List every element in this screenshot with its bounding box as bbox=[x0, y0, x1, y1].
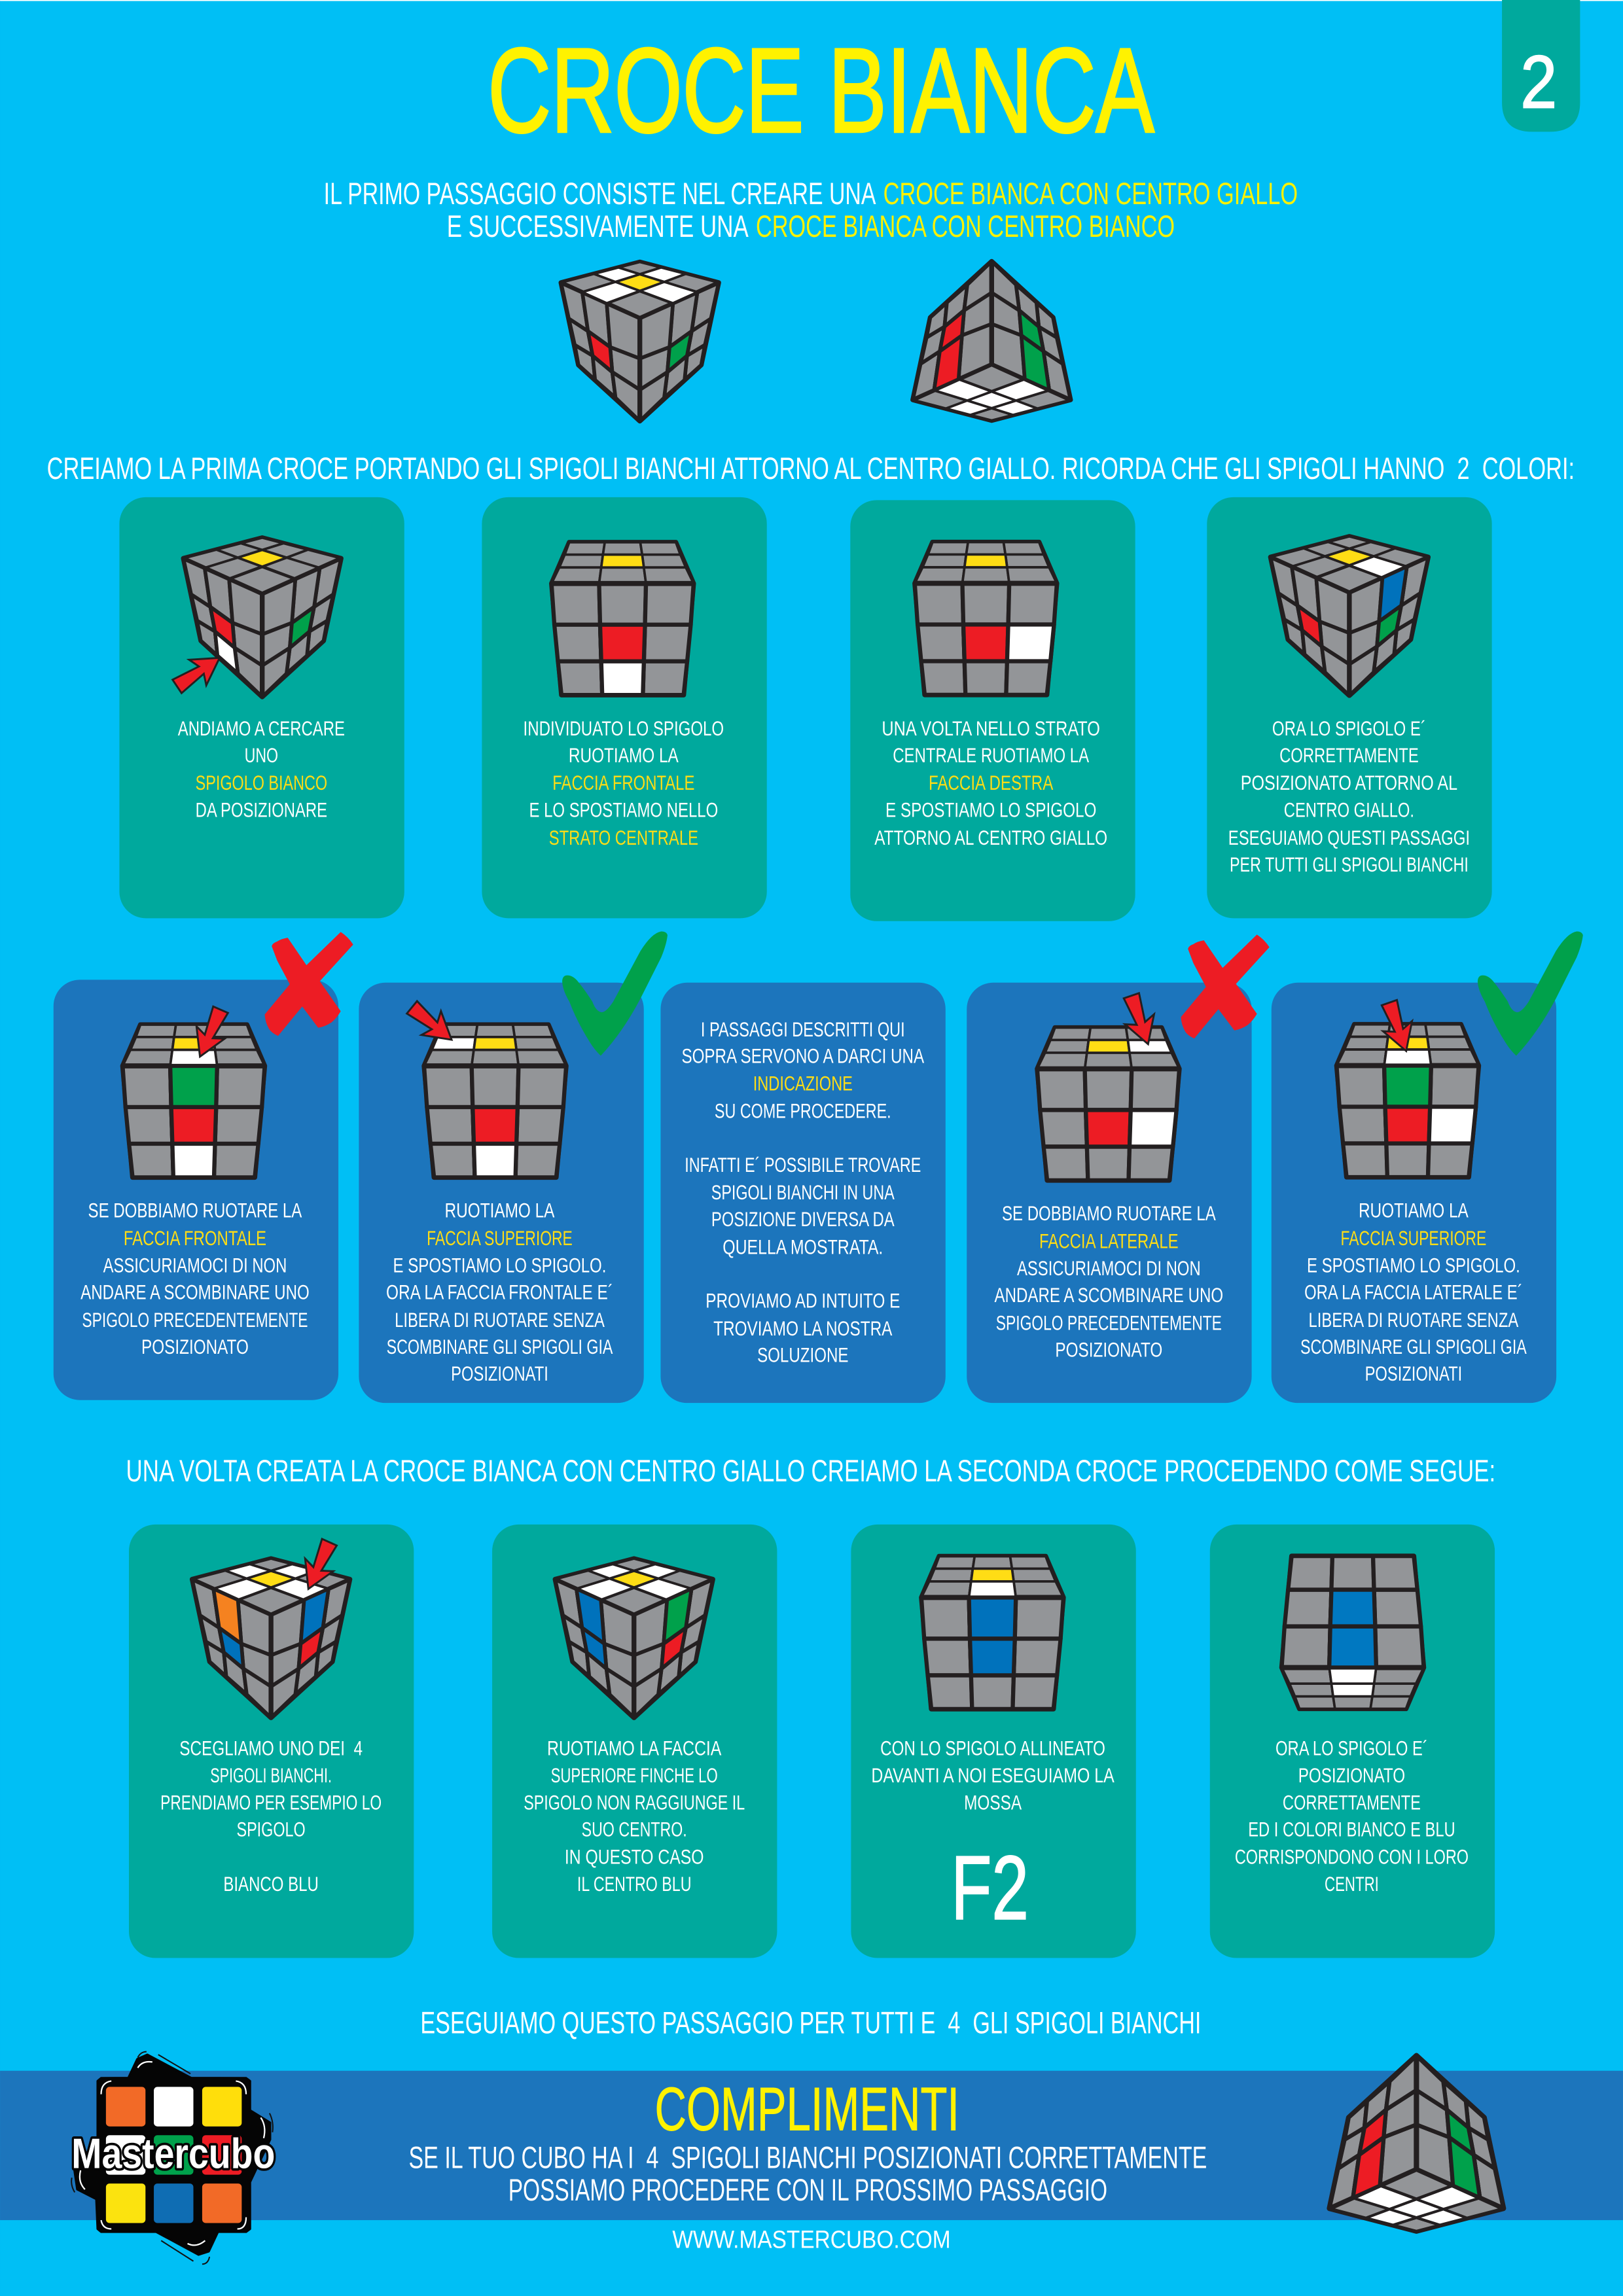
text: ORA LO SPIGOLO E´ bbox=[1275, 1736, 1428, 1759]
step number tab bbox=[1502, 0, 1580, 132]
icon: cube front view bbox=[915, 542, 1057, 695]
text: SCOMBINARE GLI SPIGOLI GIA bbox=[387, 1335, 613, 1358]
icon: cube seen from below bbox=[1281, 1556, 1424, 1708]
text: RUOTIAMO LA bbox=[1359, 1199, 1469, 1222]
text bbox=[1300, 1199, 1527, 1385]
text: PRENDIAMO PER ESEMPIO LO bbox=[160, 1790, 382, 1814]
text: I PASSAGGI DESCRITTI QUI bbox=[701, 1017, 905, 1041]
logo: Mastercubo: Mastercubo bbox=[71, 2130, 275, 2178]
text bbox=[874, 716, 1107, 849]
text: E SPOSTIAMO LO SPIGOLO. bbox=[393, 1254, 606, 1277]
intro text: E SUCCESSIVAMENTE UNA bbox=[447, 209, 749, 243]
text: SUO CENTRO. bbox=[582, 1818, 687, 1841]
icon: cube front view bbox=[1336, 1025, 1478, 1177]
text: E SPOSTIAMO LO SPIGOLO. bbox=[1307, 1254, 1520, 1277]
text: SPIGOLO bbox=[237, 1818, 306, 1841]
text bbox=[160, 1736, 382, 1896]
footer text: POSSIAMO PROCEDERE CON IL PROSSIMO PASSAGGIO bbox=[508, 2172, 1107, 2207]
text bbox=[524, 1736, 745, 1896]
step number tab: 2 bbox=[1520, 41, 1557, 124]
panel: note bbox=[660, 983, 946, 1403]
text: SPIGOLO PRECEDENTEMENTE bbox=[996, 1311, 1222, 1334]
text: ASSICURIAMOCI DI NON bbox=[103, 1254, 287, 1277]
arrow bbox=[402, 995, 461, 1051]
text: SCEGLIAMO UNO DEI 4 bbox=[179, 1736, 363, 1759]
text: SCOMBINARE GLI SPIGOLI GIA bbox=[1300, 1335, 1527, 1358]
text: CENTRO GIALLO. bbox=[1284, 798, 1414, 822]
text: TROVIAMO LA NOSTRA bbox=[713, 1316, 893, 1340]
footer heading: COMPLIMENTI bbox=[655, 2074, 959, 2143]
text: IL CENTRO BLU bbox=[577, 1872, 691, 1896]
text: CON LO SPIGOLO ALLINEATO bbox=[880, 1736, 1105, 1759]
panel: step 2 bbox=[482, 497, 767, 918]
icon: red cross bbox=[264, 932, 353, 1036]
move label F2: F2 bbox=[951, 1837, 1029, 1939]
text: E LO SPOSTIAMO NELLO bbox=[529, 798, 718, 822]
text: SE DOBBIAMO RUOTARE LA bbox=[1002, 1201, 1216, 1225]
title: CROCE BIANCA bbox=[488, 23, 1154, 157]
text: CORRISPONDONO CON I LORO bbox=[1235, 1845, 1469, 1868]
text bbox=[681, 1017, 925, 1366]
arrow bbox=[1375, 998, 1421, 1056]
panel: wrong move, front face bbox=[54, 932, 353, 1400]
text: LIBERA DI RUOTARE SENZA bbox=[1309, 1308, 1519, 1332]
panel: choose edge bbox=[129, 1525, 414, 1958]
text: SPIGOLO PRECEDENTEMENTE bbox=[82, 1308, 308, 1332]
text: ORA LA FACCIA LATERALE E´ bbox=[1304, 1280, 1523, 1303]
text: RUOTIAMO LA bbox=[445, 1199, 555, 1222]
text: ED I COLORI BIANCO E BLU bbox=[1248, 1818, 1455, 1841]
icon: cube with white cross and yellow centre bbox=[561, 262, 719, 421]
text: SU COME PROCEDERE. bbox=[715, 1099, 891, 1123]
icon: cube with white cross bbox=[555, 1559, 713, 1718]
text: QUELLA MOSTRATA. bbox=[722, 1235, 883, 1258]
text: LIBERA DI RUOTARE SENZA bbox=[395, 1308, 605, 1332]
panel: wrong move, side face bbox=[967, 934, 1270, 1403]
arrow bbox=[294, 1536, 344, 1595]
text: CENTRALE RUOTIAMO LA bbox=[893, 743, 1090, 767]
icon: cube front view bbox=[552, 542, 694, 695]
text: E SPOSTIAMO LO SPIGOLO bbox=[885, 798, 1096, 822]
text: DA POSIZIONARE bbox=[196, 798, 327, 822]
panel: rotate top face bbox=[492, 1525, 777, 1958]
text: ORA LA FACCIA FRONTALE E´ bbox=[386, 1280, 613, 1303]
text: SUPERIORE FINCHE LO bbox=[551, 1763, 718, 1787]
text bbox=[524, 716, 724, 849]
text: POSIZIONATI bbox=[1365, 1362, 1462, 1385]
intro text bbox=[324, 176, 1298, 243]
text: POSIZIONATO bbox=[1298, 1763, 1405, 1787]
text: RUOTIAMO LA bbox=[569, 743, 679, 767]
arrow bbox=[168, 645, 228, 699]
footer text bbox=[409, 2140, 1207, 2207]
text: CENTRI bbox=[1325, 1872, 1379, 1896]
text: FACCIA SUPERIORE bbox=[427, 1226, 573, 1250]
text: SE DOBBIAMO RUOTARE LA bbox=[88, 1199, 302, 1222]
text: FACCIA DESTRA bbox=[929, 771, 1054, 794]
icon: cube front view bbox=[122, 1025, 264, 1177]
text: SOPRA SERVONO A DARCI UNA bbox=[681, 1044, 925, 1068]
text: FACCIA LATERALE bbox=[1039, 1229, 1179, 1252]
text: ASSICURIAMOCI DI NON bbox=[1017, 1256, 1201, 1280]
text: FACCIA FRONTALE bbox=[552, 771, 694, 794]
icon: cube with white cross and white centre bbox=[913, 261, 1071, 421]
website: WWW.MASTERCUBO.COM bbox=[672, 2227, 951, 2254]
instruction line: ESEGUIAMO QUESTO PASSAGGIO PER TUTTI E 4 GLI SPIGOLI BIANCHI bbox=[420, 2005, 1201, 2040]
text: FACCIA FRONTALE bbox=[124, 1226, 266, 1250]
intro text: CROCE BIANCA CON CENTRO BIANCO bbox=[756, 209, 1175, 243]
footer band bbox=[0, 2071, 1623, 2220]
icon: cube front view bbox=[1037, 1028, 1179, 1180]
text: SPIGOLI BIANCHI. bbox=[210, 1763, 332, 1787]
icon: green check bbox=[562, 931, 668, 1055]
text: POSIZIONATO ATTORNO AL bbox=[1241, 771, 1457, 794]
arrow bbox=[1117, 991, 1163, 1049]
text: CORRETTAMENTE bbox=[1283, 1790, 1421, 1814]
icon: cube with white cross bbox=[192, 1559, 350, 1718]
text bbox=[386, 1199, 613, 1385]
text: ORA LO SPIGOLO E´ bbox=[1272, 716, 1426, 740]
text: IN QUESTO CASO bbox=[565, 1845, 704, 1868]
text: ANDARE A SCOMBINARE UNO bbox=[995, 1283, 1223, 1307]
text: DAVANTI A NOI ESEGUIAMO LA bbox=[871, 1763, 1115, 1787]
panel: edge placed bbox=[1210, 1525, 1495, 1958]
text bbox=[178, 716, 345, 822]
text: POSIZIONE DIVERSA DA bbox=[711, 1207, 895, 1231]
text: POSIZIONATO bbox=[141, 1335, 249, 1358]
text bbox=[995, 1201, 1223, 1361]
text: ANDIAMO A CERCARE bbox=[178, 716, 345, 740]
arrow bbox=[186, 1004, 235, 1063]
icon: cube with placed edge bbox=[1270, 537, 1428, 696]
text: PER TUTTI GLI SPIGOLI BIANCHI bbox=[1230, 853, 1469, 876]
text bbox=[80, 1199, 310, 1358]
text: UNA VOLTA NELLO STRATO bbox=[882, 716, 1100, 740]
text: PROVIAMO AD INTUITO E bbox=[705, 1289, 900, 1313]
text: SPIGOLO BIANCO bbox=[196, 771, 327, 794]
panel: F2 move bbox=[851, 1525, 1136, 1958]
panel: correct move, top face bbox=[359, 931, 668, 1403]
text bbox=[1228, 716, 1470, 876]
text: ANDARE A SCOMBINARE UNO bbox=[80, 1280, 310, 1303]
text: BIANCO BLU bbox=[223, 1872, 319, 1896]
intro text: IL PRIMO PASSAGGIO CONSISTE NEL CREARE UNA bbox=[324, 176, 876, 211]
icon: finished cube bbox=[1329, 2056, 1503, 2231]
text: RUOTIAMO LA FACCIA bbox=[547, 1736, 722, 1759]
icon: red cross bbox=[1181, 934, 1270, 1038]
text: POSIZIONATO bbox=[1055, 1337, 1162, 1361]
text: SPIGOLI BIANCHI IN UNA bbox=[711, 1180, 895, 1204]
panel: step 4 bbox=[1207, 497, 1492, 918]
icon: cube with white edge bbox=[183, 538, 341, 697]
panel: step 3 bbox=[850, 500, 1135, 921]
footer text: SE IL TUO CUBO HA I 4 SPIGOLI BIANCHI POSIZIONATI CORRETTAMENTE bbox=[409, 2140, 1207, 2175]
text: FACCIA SUPERIORE bbox=[1341, 1226, 1486, 1250]
text: ESEGUIAMO QUESTI PASSAGGI bbox=[1228, 826, 1470, 849]
text: ATTORNO AL CENTRO GIALLO bbox=[874, 826, 1107, 849]
panel: correct move, side bbox=[1272, 931, 1583, 1403]
text: INFATTI E´ POSSIBILE TROVARE bbox=[685, 1153, 921, 1176]
logo: Mastercubo bbox=[71, 2052, 275, 2264]
text: UNO bbox=[245, 743, 278, 767]
text bbox=[871, 1736, 1115, 1814]
icon: cube front view bbox=[921, 1557, 1063, 1709]
text: SOLUZIONE bbox=[757, 1343, 849, 1366]
intro text: CROCE BIANCA CON CENTRO GIALLO bbox=[883, 176, 1298, 211]
text: POSIZIONATI bbox=[451, 1362, 548, 1385]
text: MOSSA bbox=[964, 1790, 1022, 1814]
text: CORRETTAMENTE bbox=[1279, 743, 1419, 767]
panel: step 1 bbox=[119, 497, 404, 918]
text: SPIGOLO NON RAGGIUNGE IL bbox=[524, 1790, 745, 1814]
icon: green check bbox=[1478, 931, 1583, 1055]
icon: cube front view bbox=[424, 1025, 566, 1177]
text: INDIVIDUATO LO SPIGOLO bbox=[524, 716, 724, 740]
text bbox=[1235, 1736, 1469, 1896]
text: INDICAZIONE bbox=[753, 1072, 853, 1095]
text: STRATO CENTRALE bbox=[549, 826, 698, 849]
